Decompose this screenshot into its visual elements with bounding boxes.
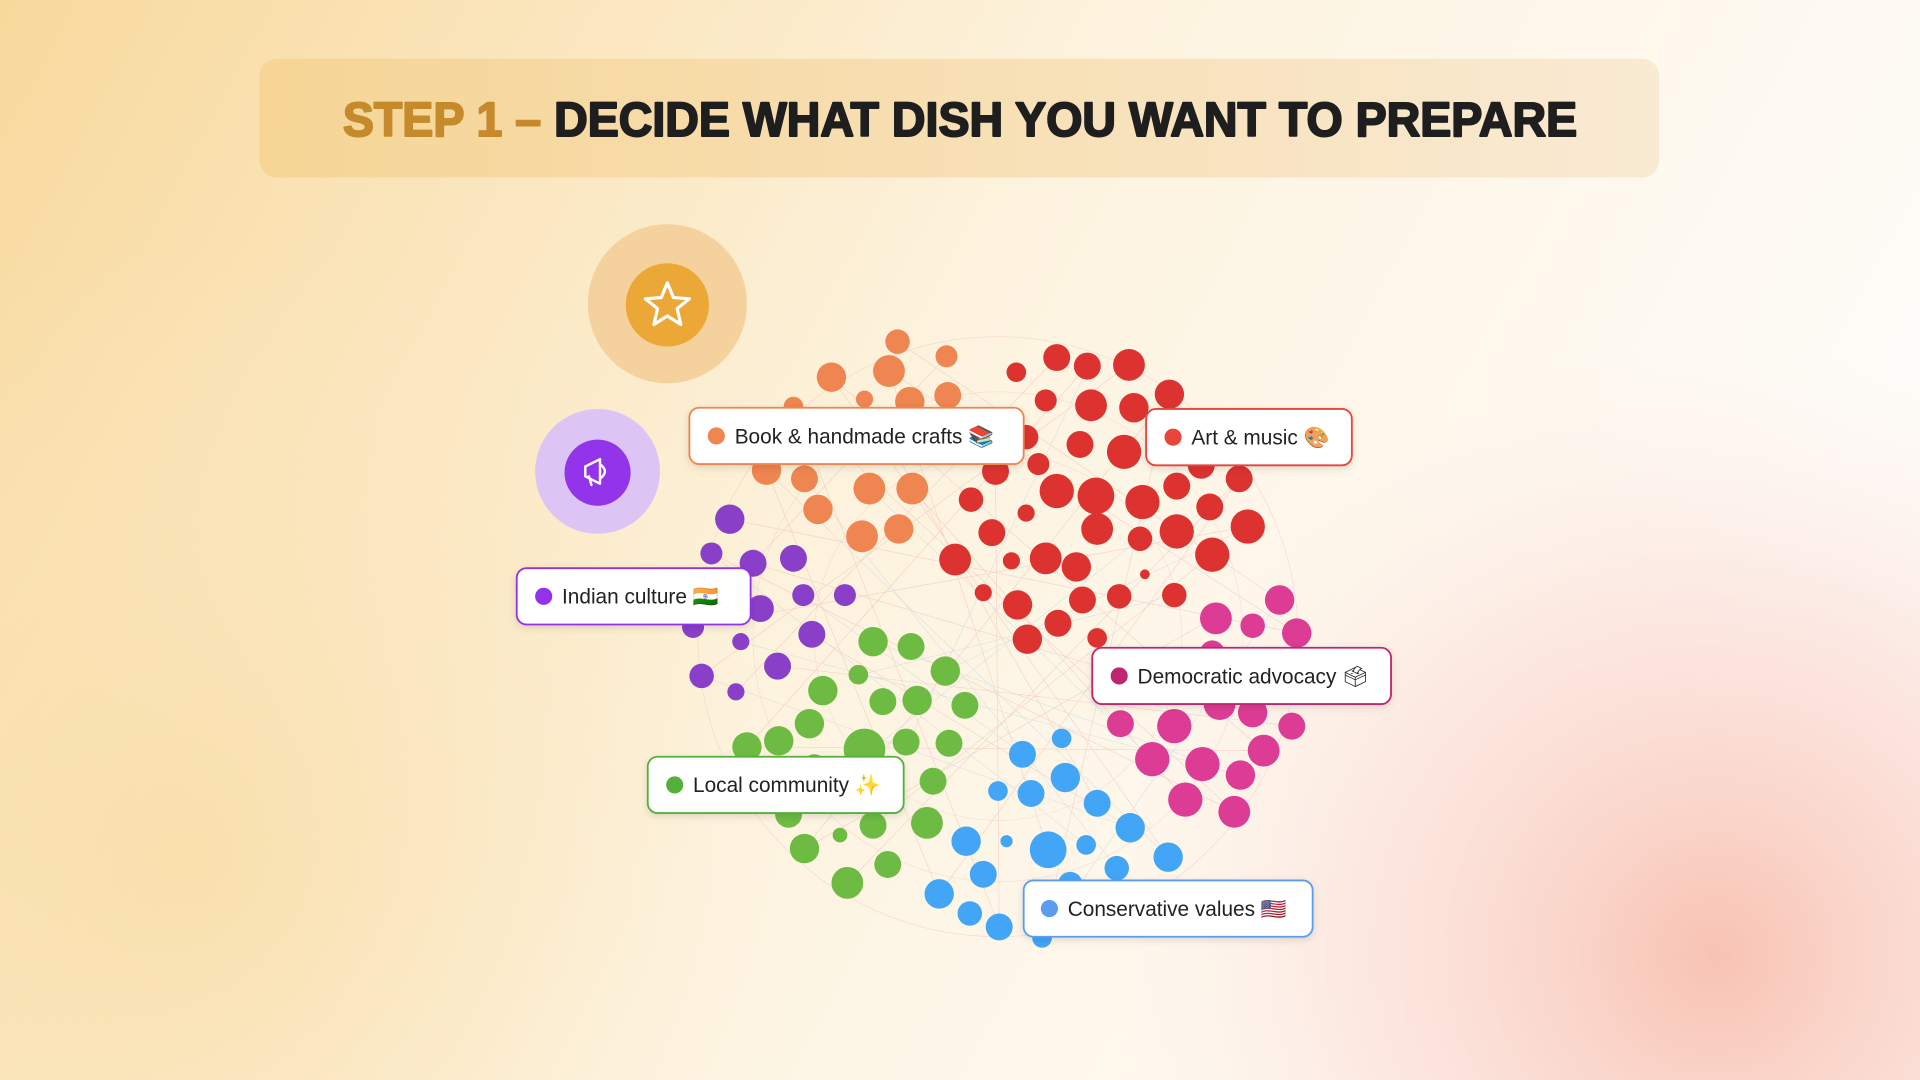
- cluster: blue: [924, 729, 1183, 948]
- icon: star: [588, 224, 747, 383]
- network graph: [682, 329, 1311, 948]
- cluster: purple: [682, 504, 856, 700]
- label: Conservative values: [1024, 880, 1313, 937]
- cluster: pink: [1107, 585, 1311, 828]
- label: Local community: Local community ✨: [693, 773, 881, 797]
- label: Book & handmade crafts: [689, 408, 1024, 464]
- title text: STEP 1 – DECIDE WHAT DISH YOU WANT TO PREPARE: [343, 94, 1577, 147]
- label: Art & music: [1146, 409, 1352, 465]
- label: Conservative values: Conservative values 🇺🇸: [1068, 898, 1287, 921]
- label: Book & handmade crafts: Book & handmade crafts 📚: [735, 424, 994, 448]
- label: Democratic advocacy: [1092, 648, 1391, 704]
- cluster: orange: [752, 329, 961, 552]
- cluster: green: [732, 627, 978, 899]
- label: Art & music: Art & music 🎨: [1191, 424, 1329, 449]
- label: Indian culture: [517, 568, 751, 624]
- label: Indian culture: Indian culture 🇮🇳: [562, 586, 719, 609]
- cluster: red: [939, 344, 1265, 654]
- icon: megaphone: [535, 409, 660, 534]
- label: Democratic advocacy: Democratic advocacy 🗳: [1138, 664, 1369, 688]
- title banner: [260, 59, 1659, 178]
- label: Local community: [648, 757, 904, 813]
